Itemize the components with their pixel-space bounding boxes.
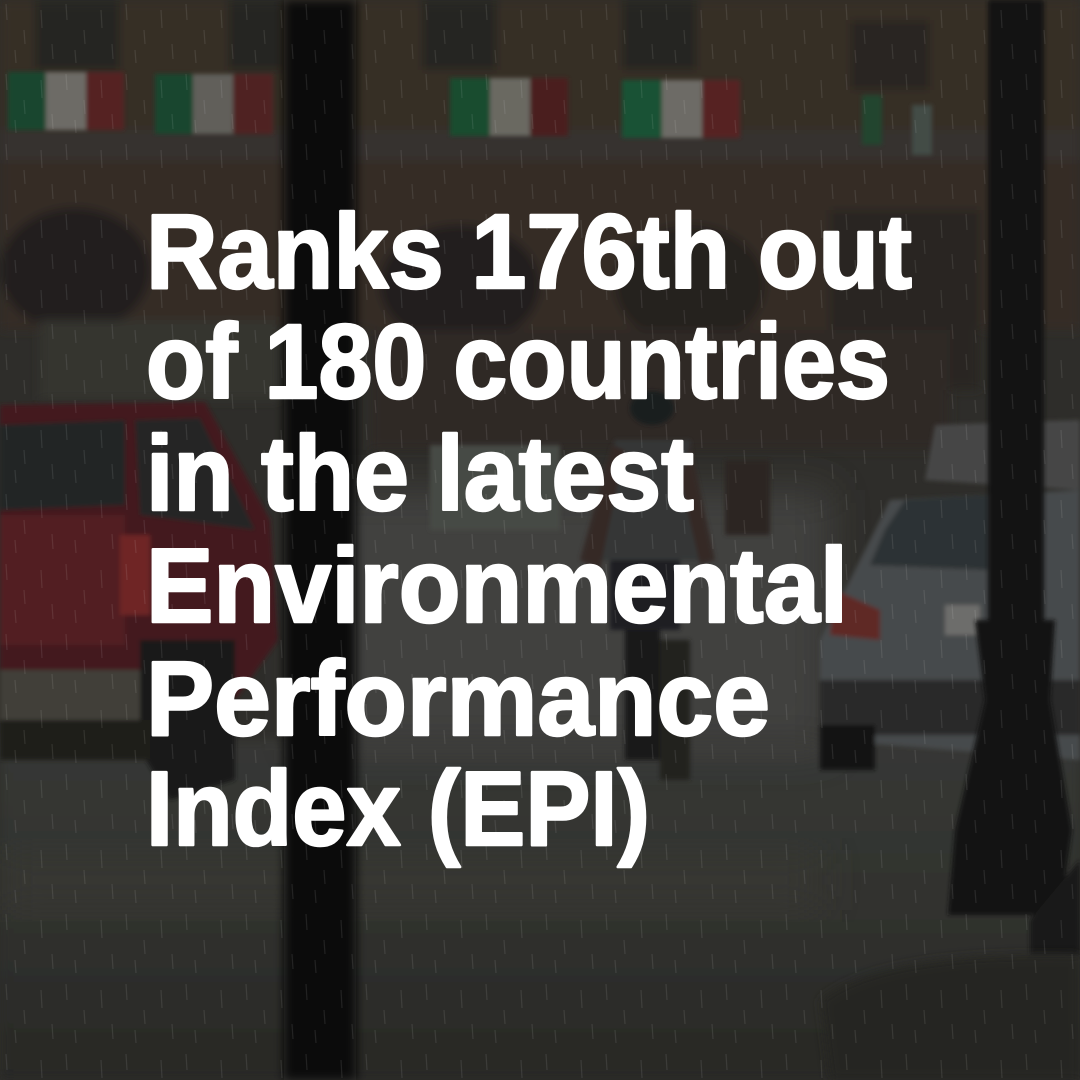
curb: [820, 955, 1080, 1080]
mexican flags: [8, 72, 932, 155]
wet street: [0, 740, 1080, 1080]
headline line 5: Performance: [146, 640, 770, 758]
headline line 4: Environmental: [146, 527, 848, 645]
silver car: [820, 420, 1080, 770]
white car in distance: [430, 445, 560, 530]
headline line 6: Index (EPI): [146, 750, 650, 868]
building facade: [0, 0, 1080, 450]
headline: [146, 193, 912, 868]
cyclist: [580, 391, 770, 780]
lamp post: [948, 0, 1080, 955]
headline line 3: in the latest: [146, 415, 694, 533]
headline line 2: of 180 countries: [146, 303, 890, 421]
headline line 1: Ranks 176th out: [146, 193, 912, 311]
near dark pole: [284, 0, 356, 1080]
red pickup truck: [0, 402, 278, 800]
